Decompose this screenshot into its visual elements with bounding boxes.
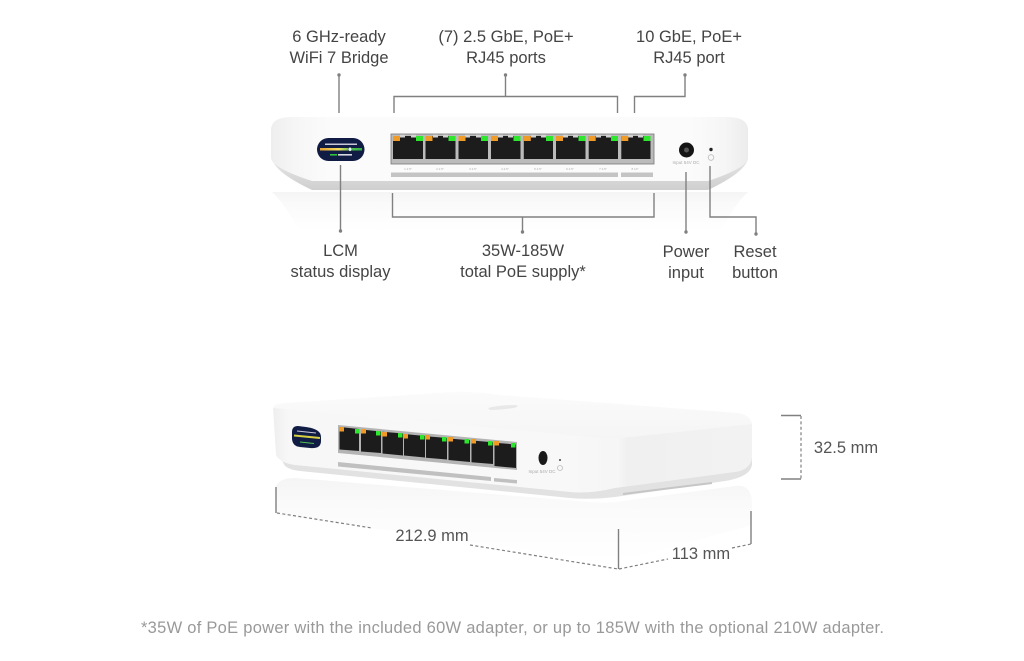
port numbers: 8 10" xyxy=(632,167,638,171)
LCM status display xyxy=(317,138,364,161)
power jack: Input 54V DC xyxy=(672,160,700,165)
port numbers: 2 2.5" xyxy=(436,167,444,171)
label: WiFi bridge xyxy=(289,28,389,67)
label: width: 212.9 mm xyxy=(395,527,469,545)
reflection xyxy=(275,478,752,562)
label: height: 32.5 mm xyxy=(814,439,878,457)
label: depth: 113 mm xyxy=(672,545,730,563)
label: power input xyxy=(663,243,710,282)
height dimension xyxy=(781,416,801,479)
label: 2.5 GbE ports xyxy=(438,28,574,67)
label: WiFi bridge: WiFi 7 Bridge xyxy=(289,49,389,67)
reset pinhole xyxy=(558,459,562,470)
label: reset button: Reset xyxy=(733,243,777,261)
label: 10 GbE port: RJ45 port xyxy=(653,49,725,67)
port numbers: 7 2.5" xyxy=(599,167,607,171)
port block xyxy=(338,425,517,470)
port numbers: 3 2.5" xyxy=(469,167,477,171)
footnote: *35W of PoE power with the included 60W adapter, or up to 185W with the optional 210W adapter. xyxy=(141,619,884,637)
label: reset button: button xyxy=(732,264,778,282)
port numbers: 6 2.5" xyxy=(566,167,574,171)
label: power input: Power xyxy=(663,243,710,261)
reset pinhole xyxy=(708,148,714,160)
port group bars xyxy=(391,172,653,177)
depth dimension xyxy=(619,511,751,569)
label: LCM: LCM xyxy=(323,242,358,260)
vent xyxy=(623,483,712,494)
chassis body front and right xyxy=(273,407,752,492)
bottom device: angled view of switch xyxy=(273,392,752,562)
label: LCM: status display xyxy=(291,263,391,281)
port numbers xyxy=(404,167,638,171)
port group bars xyxy=(338,462,517,484)
chassis front xyxy=(271,117,748,181)
chassis lip xyxy=(272,158,748,190)
bottom lip xyxy=(276,450,752,499)
label: PoE supply: total PoE supply* xyxy=(460,263,586,281)
label: 2.5 GbE ports: (7) 2.5 GbE, PoE+ xyxy=(438,28,574,46)
LCM display xyxy=(292,426,321,448)
label: 10 GbE port: 10 GbE, PoE+ xyxy=(636,28,742,46)
port numbers: 5 2.5" xyxy=(534,167,542,171)
power jack xyxy=(528,451,556,474)
label: WiFi bridge: 6 GHz-ready xyxy=(292,28,387,46)
power jack xyxy=(672,142,700,165)
label: 10 GbE port xyxy=(636,28,742,67)
port numbers: 1 2.5" xyxy=(404,167,412,171)
power jack: Input 54V DC xyxy=(528,469,556,474)
label: PoE supply: 35W-185W xyxy=(482,242,565,260)
label: LCM xyxy=(291,242,391,281)
label: 2.5 GbE ports: RJ45 ports xyxy=(466,49,546,67)
reflection xyxy=(272,192,748,232)
logo xyxy=(488,405,518,410)
port block: 8 RJ45 ports xyxy=(391,134,654,164)
width dimension xyxy=(276,487,618,569)
label: power input: input xyxy=(668,264,704,282)
label: PoE supply xyxy=(460,242,586,281)
top device: front view of switch xyxy=(271,117,748,232)
top surface xyxy=(273,392,752,439)
port numbers: 4 2.5" xyxy=(501,167,509,171)
label: reset button xyxy=(732,243,778,282)
leader lines: top device xyxy=(337,73,758,236)
